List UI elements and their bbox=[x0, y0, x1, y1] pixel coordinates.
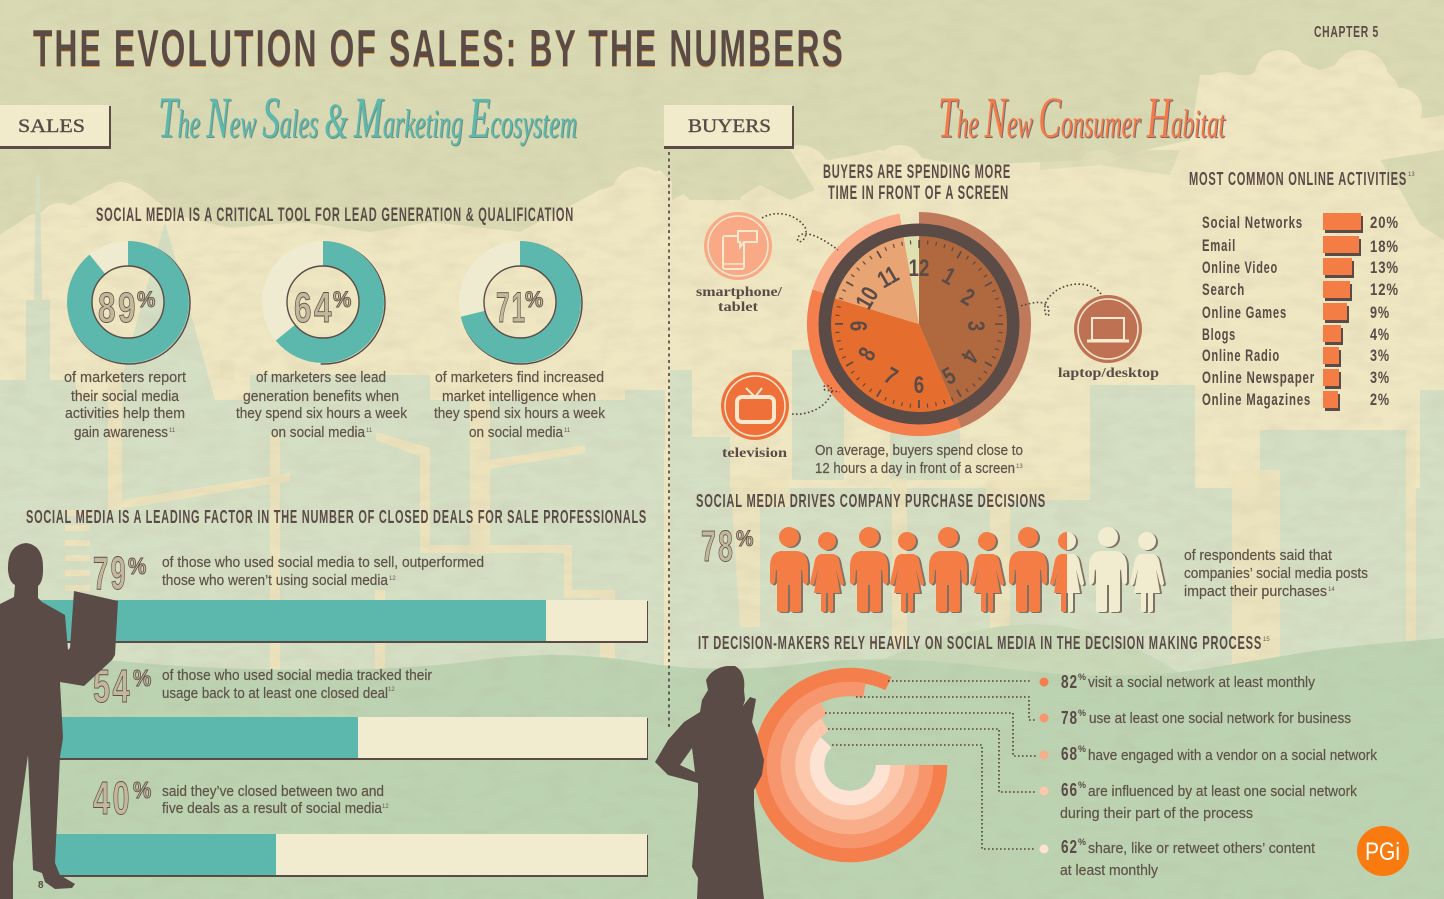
stat 79%: 12 bbox=[389, 576, 396, 582]
clock numerals: 10 bbox=[850, 282, 884, 314]
caption 71%: market intelligence when bbox=[442, 389, 596, 405]
donut chart 64%: 64 bbox=[294, 284, 334, 332]
stat 79%: 79 bbox=[93, 547, 128, 599]
clock numerals: 3 bbox=[962, 321, 989, 331]
stat 79%: those who weren’t using social media bbox=[162, 573, 389, 589]
bar chart: online activities: Online Radio bbox=[1202, 346, 1280, 365]
item 66%: are influenced by at least one social network bbox=[1088, 784, 1358, 800]
heading: lead generation: SOCIAL MEDIA IS A CRITICAL TOOL FOR LEAD GENERATION & QUALIFICATION bbox=[96, 205, 574, 226]
stat 54% bbox=[93, 660, 432, 712]
bar chart: online activities: 2% bbox=[1370, 390, 1390, 409]
clock face wedges bbox=[831, 236, 1007, 412]
heading: screen time: BUYERS ARE SPENDING MORE bbox=[823, 162, 1011, 183]
bar chart: online activities: 9% bbox=[1370, 303, 1390, 322]
item 82%: % bbox=[1078, 672, 1087, 682]
clock outer ring segments bbox=[813, 218, 1025, 430]
pictogram: people bbox=[770, 527, 1164, 612]
silhouette: businesswoman with phone bbox=[655, 666, 764, 899]
item 68%: have engaged with a vendor on a social network bbox=[1088, 748, 1378, 764]
bar chart: online activities: 18% bbox=[1370, 237, 1399, 256]
item 62%: % bbox=[1078, 837, 1087, 847]
item 62%: at least monthly bbox=[1060, 863, 1159, 879]
caption 71%: of marketers find increased bbox=[435, 370, 604, 386]
clock numerals: 2 bbox=[957, 283, 979, 311]
clock numerals: 12 bbox=[909, 255, 929, 282]
bar chart: online activities: Search bbox=[1202, 280, 1245, 299]
chapter label: CHAPTER 5 bbox=[1314, 24, 1379, 41]
stat 79%: of those who used social media to sell, outperformed bbox=[162, 555, 484, 571]
caption 71%: 11 bbox=[564, 428, 571, 434]
bar chart: online activities: 13% bbox=[1370, 258, 1399, 277]
donut chart 71% bbox=[460, 242, 582, 364]
buyers tab: BUYERS bbox=[688, 116, 771, 137]
stat 40%: 12 bbox=[382, 804, 389, 810]
item 66%: during their part of the process bbox=[1060, 806, 1253, 822]
bar chart: online activities: Online Video bbox=[1202, 258, 1278, 277]
caption 64%: on social media bbox=[271, 425, 366, 441]
clock numerals: 7 bbox=[880, 362, 902, 390]
item 82% bbox=[1061, 672, 1316, 692]
buyers script heading: The New Consumer Habitat bbox=[938, 85, 1226, 150]
caption 89%: gain awareness bbox=[74, 425, 168, 441]
radial bar chart bbox=[760, 675, 940, 855]
clock dark bezel bbox=[825, 230, 1013, 418]
caption 64%: they spend six hours a week bbox=[236, 406, 408, 422]
clock numerals: 5 bbox=[938, 362, 960, 390]
clock caption: 13 bbox=[1016, 464, 1023, 470]
caption 64% bbox=[236, 370, 408, 441]
stat 40%: % bbox=[133, 777, 153, 803]
stat 78%: 78 bbox=[701, 522, 735, 571]
dotted connector: laptop bbox=[1020, 284, 1101, 316]
stat 79% bbox=[93, 547, 484, 599]
item 78%: 78 bbox=[1061, 708, 1078, 728]
item 68% bbox=[1061, 744, 1378, 764]
bar chart: online activities: 12% bbox=[1370, 280, 1399, 299]
clock caption bbox=[815, 443, 1023, 477]
item 68%: 68 bbox=[1061, 744, 1078, 764]
legend dots bbox=[1040, 678, 1048, 854]
clock caption: 12 hours a day in front of a screen bbox=[815, 461, 1015, 477]
stat 54%: usage back to at least one closed deal bbox=[162, 686, 388, 702]
panel: sales bbox=[0, 85, 648, 899]
clock caption: On average, buyers spend close to bbox=[815, 443, 1023, 459]
clock numerals: 4 bbox=[956, 345, 984, 367]
item 66% bbox=[1060, 780, 1358, 822]
logo: PGi: PGi bbox=[1365, 838, 1400, 866]
caption 64%: of marketers see lead bbox=[256, 370, 386, 386]
caption 71%: on social media bbox=[469, 425, 564, 441]
bar chart: online activities: 3% bbox=[1370, 346, 1390, 365]
stat 54%: 12 bbox=[388, 687, 395, 693]
bar 40% bbox=[55, 834, 648, 877]
bar chart: online activities: Social Networks bbox=[1202, 213, 1303, 232]
buyers tab bbox=[664, 105, 794, 149]
bar 54% bbox=[55, 717, 648, 760]
caption 89% bbox=[64, 370, 186, 441]
logo: PGi bbox=[1357, 826, 1409, 876]
legend list: IT decision-makers bbox=[1040, 672, 1378, 879]
dotted connector: television bbox=[792, 385, 840, 414]
stat 40%: said they’ve closed between two and bbox=[162, 784, 384, 800]
caption 64%: generation benefits when bbox=[243, 389, 399, 405]
icon: smartphone bbox=[704, 212, 772, 280]
stat 40%: 40 bbox=[93, 772, 132, 824]
clock ticks bbox=[837, 242, 1001, 406]
dotted divider bbox=[668, 152, 670, 730]
heading: closed deals: SOCIAL MEDIA IS A LEADING FACTOR IN THE NUMBER OF CLOSED DEALS FOR SALE PROFESSIONALS bbox=[26, 507, 647, 527]
heading: purchase decisions: SOCIAL MEDIA DRIVES COMPANY PURCHASE DECISIONS bbox=[696, 491, 1046, 511]
bar chart: online activities: Online Newspaper bbox=[1202, 368, 1315, 387]
stat 54%: % bbox=[133, 665, 153, 691]
stat 40% bbox=[93, 772, 389, 824]
stat 40%: five deals as a result of social media bbox=[162, 801, 383, 817]
respondents caption bbox=[1184, 548, 1368, 600]
caption 71% bbox=[434, 370, 606, 441]
clock numerals: 11 bbox=[873, 261, 903, 294]
label laptop: laptop/desktop bbox=[1058, 365, 1159, 380]
donut chart 89%: 89 bbox=[98, 284, 138, 332]
donut chart 71%: 71 bbox=[496, 284, 527, 332]
heading: screen time bbox=[823, 162, 1011, 204]
clock chart bbox=[813, 218, 1025, 430]
dotted connectors: radial chart bbox=[825, 681, 1036, 849]
respondents caption: 14 bbox=[1328, 587, 1335, 593]
donut chart 64%: % bbox=[333, 287, 353, 312]
item 78%: % bbox=[1078, 708, 1087, 718]
sales tab: SALES bbox=[18, 116, 85, 137]
icon: laptop bbox=[1074, 295, 1142, 363]
stat 79%: % bbox=[128, 553, 148, 579]
respondents caption: of respondents said that bbox=[1184, 548, 1332, 564]
donut chart 89%: % bbox=[137, 287, 157, 312]
bar chart: online activities: 20% bbox=[1370, 213, 1399, 232]
label television: television bbox=[722, 445, 788, 460]
label smartphone: smartphone/ bbox=[696, 284, 782, 299]
bar chart: online activities: 4% bbox=[1370, 325, 1390, 344]
item 62%: 62 bbox=[1061, 837, 1078, 857]
sales script heading: The New Sales & Marketing Ecosystem bbox=[158, 85, 577, 150]
item 66%: % bbox=[1078, 780, 1087, 790]
item 62%: share, like or retweet others’ content bbox=[1088, 841, 1315, 857]
caption 89%: activities help them bbox=[65, 406, 185, 422]
label smartphone: tablet bbox=[718, 299, 759, 314]
donut chart 64% bbox=[263, 242, 385, 364]
heading: screen time: TIME IN FRONT OF A SCREEN bbox=[828, 183, 1009, 204]
clock numerals: 8 bbox=[853, 343, 881, 365]
heading: online activities: 13 bbox=[1408, 172, 1415, 178]
panel: buyers bbox=[655, 85, 1415, 899]
item 82%: visit a social network at least monthly bbox=[1088, 675, 1316, 691]
donut chart 89% bbox=[68, 242, 190, 364]
heading: IT decision-makers: 15 bbox=[1263, 637, 1270, 643]
dotted connector: smartphone bbox=[762, 214, 838, 250]
item 68%: % bbox=[1078, 744, 1087, 754]
stat 78%: % bbox=[736, 526, 755, 551]
bar chart: online activities: 3% bbox=[1370, 368, 1390, 387]
label smartphone bbox=[696, 284, 782, 314]
item 78% bbox=[1061, 708, 1351, 728]
icon: television bbox=[721, 372, 789, 440]
bar chart: online activities: Online Games bbox=[1202, 303, 1287, 322]
clock numerals: 9 bbox=[846, 321, 873, 331]
bar chart: online activities: Blogs bbox=[1202, 325, 1236, 344]
respondents caption: impact their purchases bbox=[1184, 584, 1327, 600]
stat 54%: 54 bbox=[93, 660, 132, 712]
bar 79% bbox=[40, 600, 648, 643]
caption 89%: their social media bbox=[71, 389, 180, 405]
bar chart: online activities bbox=[1202, 213, 1399, 411]
silhouette: businessman with laptop bbox=[0, 543, 118, 899]
caption 89%: 11 bbox=[169, 428, 176, 434]
item 78%: use at least one social network for business bbox=[1089, 711, 1351, 727]
page number: 8 bbox=[38, 880, 44, 891]
item 66%: 66 bbox=[1061, 780, 1078, 800]
caption 71%: they spend six hours a week bbox=[434, 406, 606, 422]
clock numerals: 1 bbox=[938, 262, 960, 290]
donut chart 71%: % bbox=[525, 287, 545, 312]
clock numerals bbox=[846, 255, 989, 399]
bar chart: online activities: Online Magazines bbox=[1202, 390, 1311, 409]
item 82%: 82 bbox=[1061, 672, 1078, 692]
item 62% bbox=[1060, 837, 1315, 879]
stat 54%: of those who used social media tracked their bbox=[162, 668, 432, 684]
caption 64%: 11 bbox=[366, 428, 373, 434]
clock numerals: 6 bbox=[914, 372, 924, 399]
bar chart: online activities: Email bbox=[1202, 236, 1236, 255]
caption 89%: of marketers report bbox=[64, 370, 186, 386]
title: THE EVOLUTION OF SALES: BY THE NUMBERS bbox=[33, 20, 845, 78]
sales tab bbox=[0, 105, 111, 149]
respondents caption: companies’ social media posts bbox=[1184, 566, 1368, 582]
